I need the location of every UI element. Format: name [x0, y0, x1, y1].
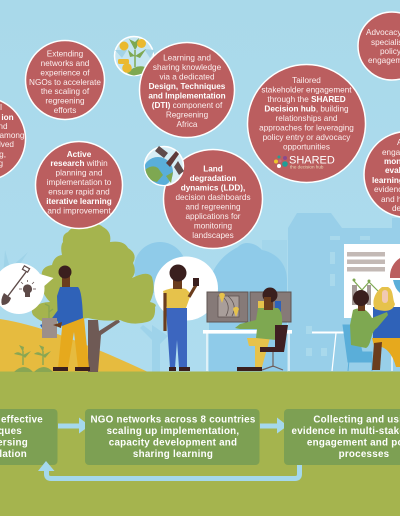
process box 1 — [0, 409, 58, 465]
SHARED logo: SHARED — [289, 154, 335, 166]
circle: land degradation dynamics: degradation — [190, 174, 236, 183]
circle: extending networks — [26, 40, 104, 120]
circle: tailored stakeholder engagement: relationships and — [276, 114, 338, 123]
process box 2: capacity development and — [109, 438, 237, 448]
circle: extending networks: Extending — [47, 50, 84, 58]
circle: learning and sharing: Learning and — [163, 54, 211, 62]
circle: learning and sharing: Africa — [177, 120, 198, 129]
circle: active research: Active — [67, 150, 92, 159]
whiteboard with chart — [344, 244, 400, 318]
circle: extending networks: experience of — [40, 68, 90, 78]
circle: active research: implementation to — [47, 178, 112, 187]
circle: active research: research within — [50, 159, 108, 168]
arrow: box 2 to box 3 — [260, 418, 288, 434]
circle: extending networks: the scaling of — [41, 87, 90, 96]
circle: extending networks: networks and — [41, 59, 90, 68]
circle: partially visible left: ion — [1, 113, 14, 122]
process box 2: NGO networks across 8 countries — [90, 414, 256, 426]
speech bubble: tools — [0, 263, 54, 314]
process box 3: processes — [339, 449, 390, 460]
circle: tailored stakeholder engagement: opportunities — [283, 142, 330, 152]
circle: active research: and improvement — [47, 206, 111, 216]
circle: learning and sharing — [140, 42, 234, 138]
circle: advocacy — [358, 12, 400, 80]
icon: satellite and globe — [143, 146, 184, 187]
circle: learning and sharing: (DTI) component of — [152, 101, 223, 110]
circle: partially visible left: l — [0, 103, 2, 112]
circle: tailored stakeholder engagement — [248, 64, 366, 182]
circle: land degradation dynamics: landscapes — [192, 231, 234, 240]
circle: active research: planning and — [56, 168, 103, 178]
process box 2: scaling up implementation, — [107, 426, 239, 437]
SHARED logo — [274, 154, 335, 170]
icon: money plant — [114, 36, 155, 76]
circle: tailored stakeholder engagement: through the SHARED — [267, 95, 346, 104]
speech bubble: woman — [154, 256, 218, 320]
feedback arrowhead — [38, 461, 54, 471]
circle: tailored stakeholder engagement: approaches for leveraging — [259, 124, 354, 132]
circle: learning and sharing: sharing knowledge — [153, 63, 222, 72]
process box 3 — [284, 409, 400, 465]
circle: learning and sharing: and Implementation — [148, 92, 226, 100]
process box 1: effective — [1, 414, 43, 426]
ground — [0, 372, 400, 516]
SHARED logo: the decision hub — [290, 164, 324, 170]
circle: learning and sharing: via a dedicated — [159, 72, 215, 82]
arrow: box 1 to box 2 — [58, 418, 90, 434]
process box 2: sharing learning — [133, 449, 213, 460]
woman with phone — [163, 264, 199, 371]
circle: active research: iterative learning — [46, 197, 112, 206]
circle: tailored stakeholder engagement: Decision hub, building — [264, 104, 349, 114]
process box 2 — [85, 409, 260, 465]
circle: land degradation dynamics: decision dashboards — [175, 193, 251, 202]
circle: tailored stakeholder engagement: policy entry or advocacy — [263, 133, 351, 142]
circle: learning and sharing: Design, Techniques — [149, 82, 226, 91]
circle: land degradation dynamics: monitoring — [194, 222, 233, 230]
circle: tailored stakeholder engagement: stakeholder engagement — [261, 86, 352, 94]
farmer with potted plant — [40, 266, 90, 371]
meeting table and two colleagues — [312, 287, 400, 371]
circle: tailored stakeholder engagement: Tailored — [292, 76, 321, 85]
feedback arrow: box 3 to box 1 — [46, 465, 300, 478]
circle: extending networks: efforts — [54, 106, 76, 115]
circle: learning and sharing: Regreening — [166, 110, 209, 120]
circle: extending networks: regreening — [45, 96, 85, 106]
circle: active research: ensure rapid and — [48, 188, 110, 196]
background city and trees — [2, 213, 400, 372]
circle: land degradation dynamics — [164, 150, 262, 248]
circle: partially visible left: among — [0, 131, 25, 140]
circle: land degradation dynamics: applications for — [185, 212, 241, 221]
tree — [32, 224, 156, 372]
sky background — [0, 0, 400, 375]
circle: extending networks: NGOs to accelerate — [29, 78, 101, 87]
desk with analyst at monitors — [203, 288, 292, 371]
circle: land degradation dynamics: dynamics (LDD), — [181, 184, 245, 192]
circle: land degradation dynamics: Land — [203, 164, 223, 174]
circle: monitoring and evaluation — [364, 132, 400, 218]
circle: partially visible left — [0, 98, 26, 180]
circle: land degradation dynamics: and regreening — [185, 202, 241, 212]
circle: active research — [36, 142, 122, 228]
yellow hill — [0, 319, 148, 372]
seedlings — [14, 345, 53, 372]
process box 1: lation — [0, 449, 27, 460]
